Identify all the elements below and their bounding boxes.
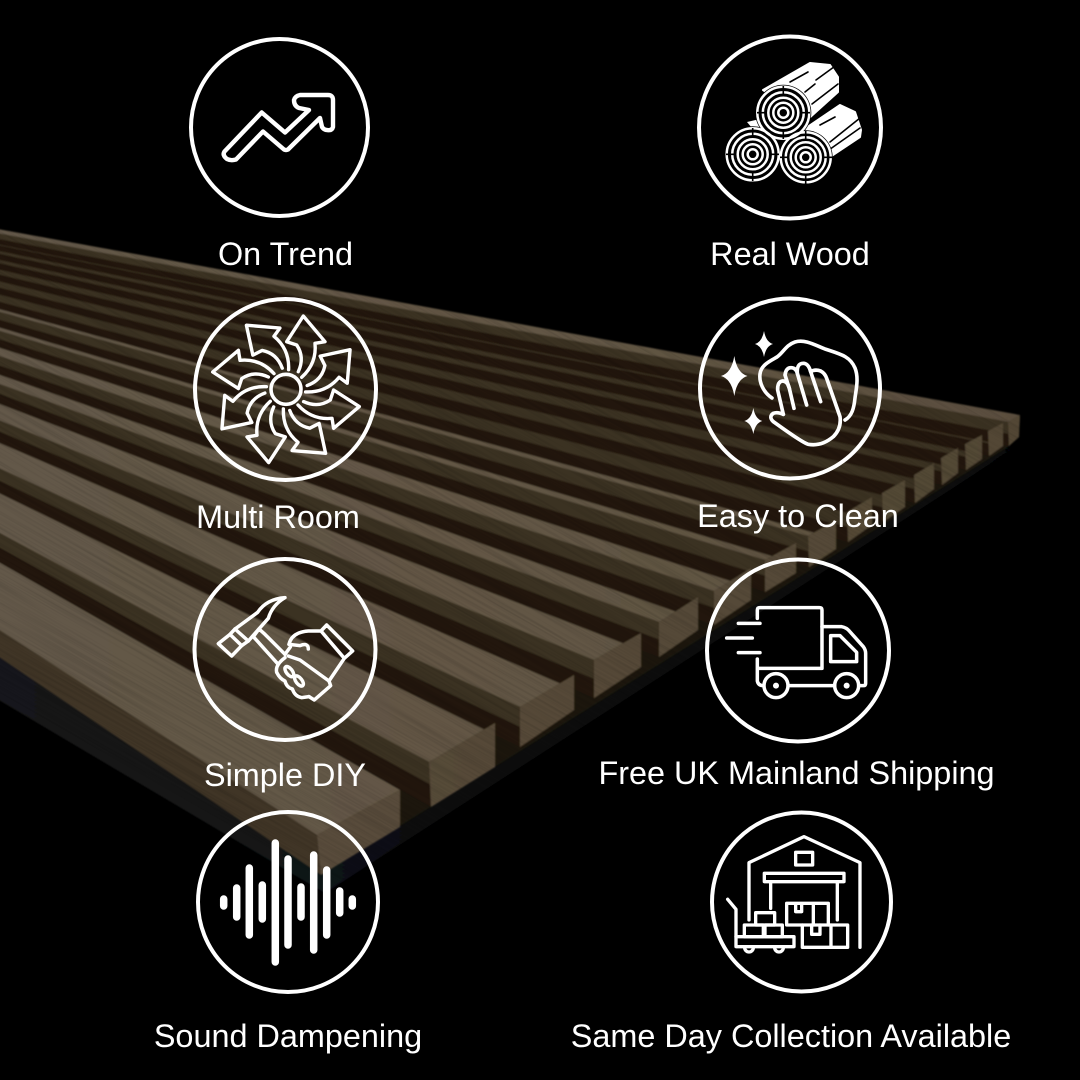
feature: Free UK Mainland Shipping — [598, 560, 995, 791]
icon: delivery truck — [707, 560, 889, 742]
feature: Easy to Clean — [697, 298, 899, 534]
feature: Multi Room — [195, 299, 376, 535]
label: Free UK Mainland Shipping: Free UK Mainland Shipping — [598, 755, 995, 791]
icon: radiating arrows — [195, 299, 376, 480]
icon: rising trend arrow — [191, 39, 368, 216]
feature: Simple DIY — [194, 559, 376, 793]
feature: Same Day Collection Available — [571, 812, 1011, 1054]
label: Real Wood: Real Wood — [710, 236, 870, 272]
felt backing — [0, 72, 1020, 893]
icon: warehouse with trolley and boxes — [712, 812, 891, 992]
wood slats — [0, 72, 1020, 875]
label: Multi Room: Multi Room — [196, 499, 360, 535]
label: On Trend: On Trend — [218, 236, 353, 272]
icon: hand holding hammer — [194, 559, 376, 740]
feature: On Trend — [191, 39, 368, 272]
label: Simple DIY: Simple DIY — [204, 757, 366, 793]
label: Sound Dampening: Sound Dampening — [154, 1018, 422, 1054]
label: Same Day Collection Available: Same Day Collection Available — [571, 1018, 1011, 1054]
label: Easy to Clean: Easy to Clean — [697, 498, 899, 534]
icon: stacked logs — [699, 36, 881, 218]
feature: Real Wood — [699, 36, 881, 272]
icon: sound wave — [198, 812, 378, 992]
feature: Sound Dampening — [154, 812, 422, 1054]
icon: hand wiping with sparkles — [700, 298, 880, 478]
